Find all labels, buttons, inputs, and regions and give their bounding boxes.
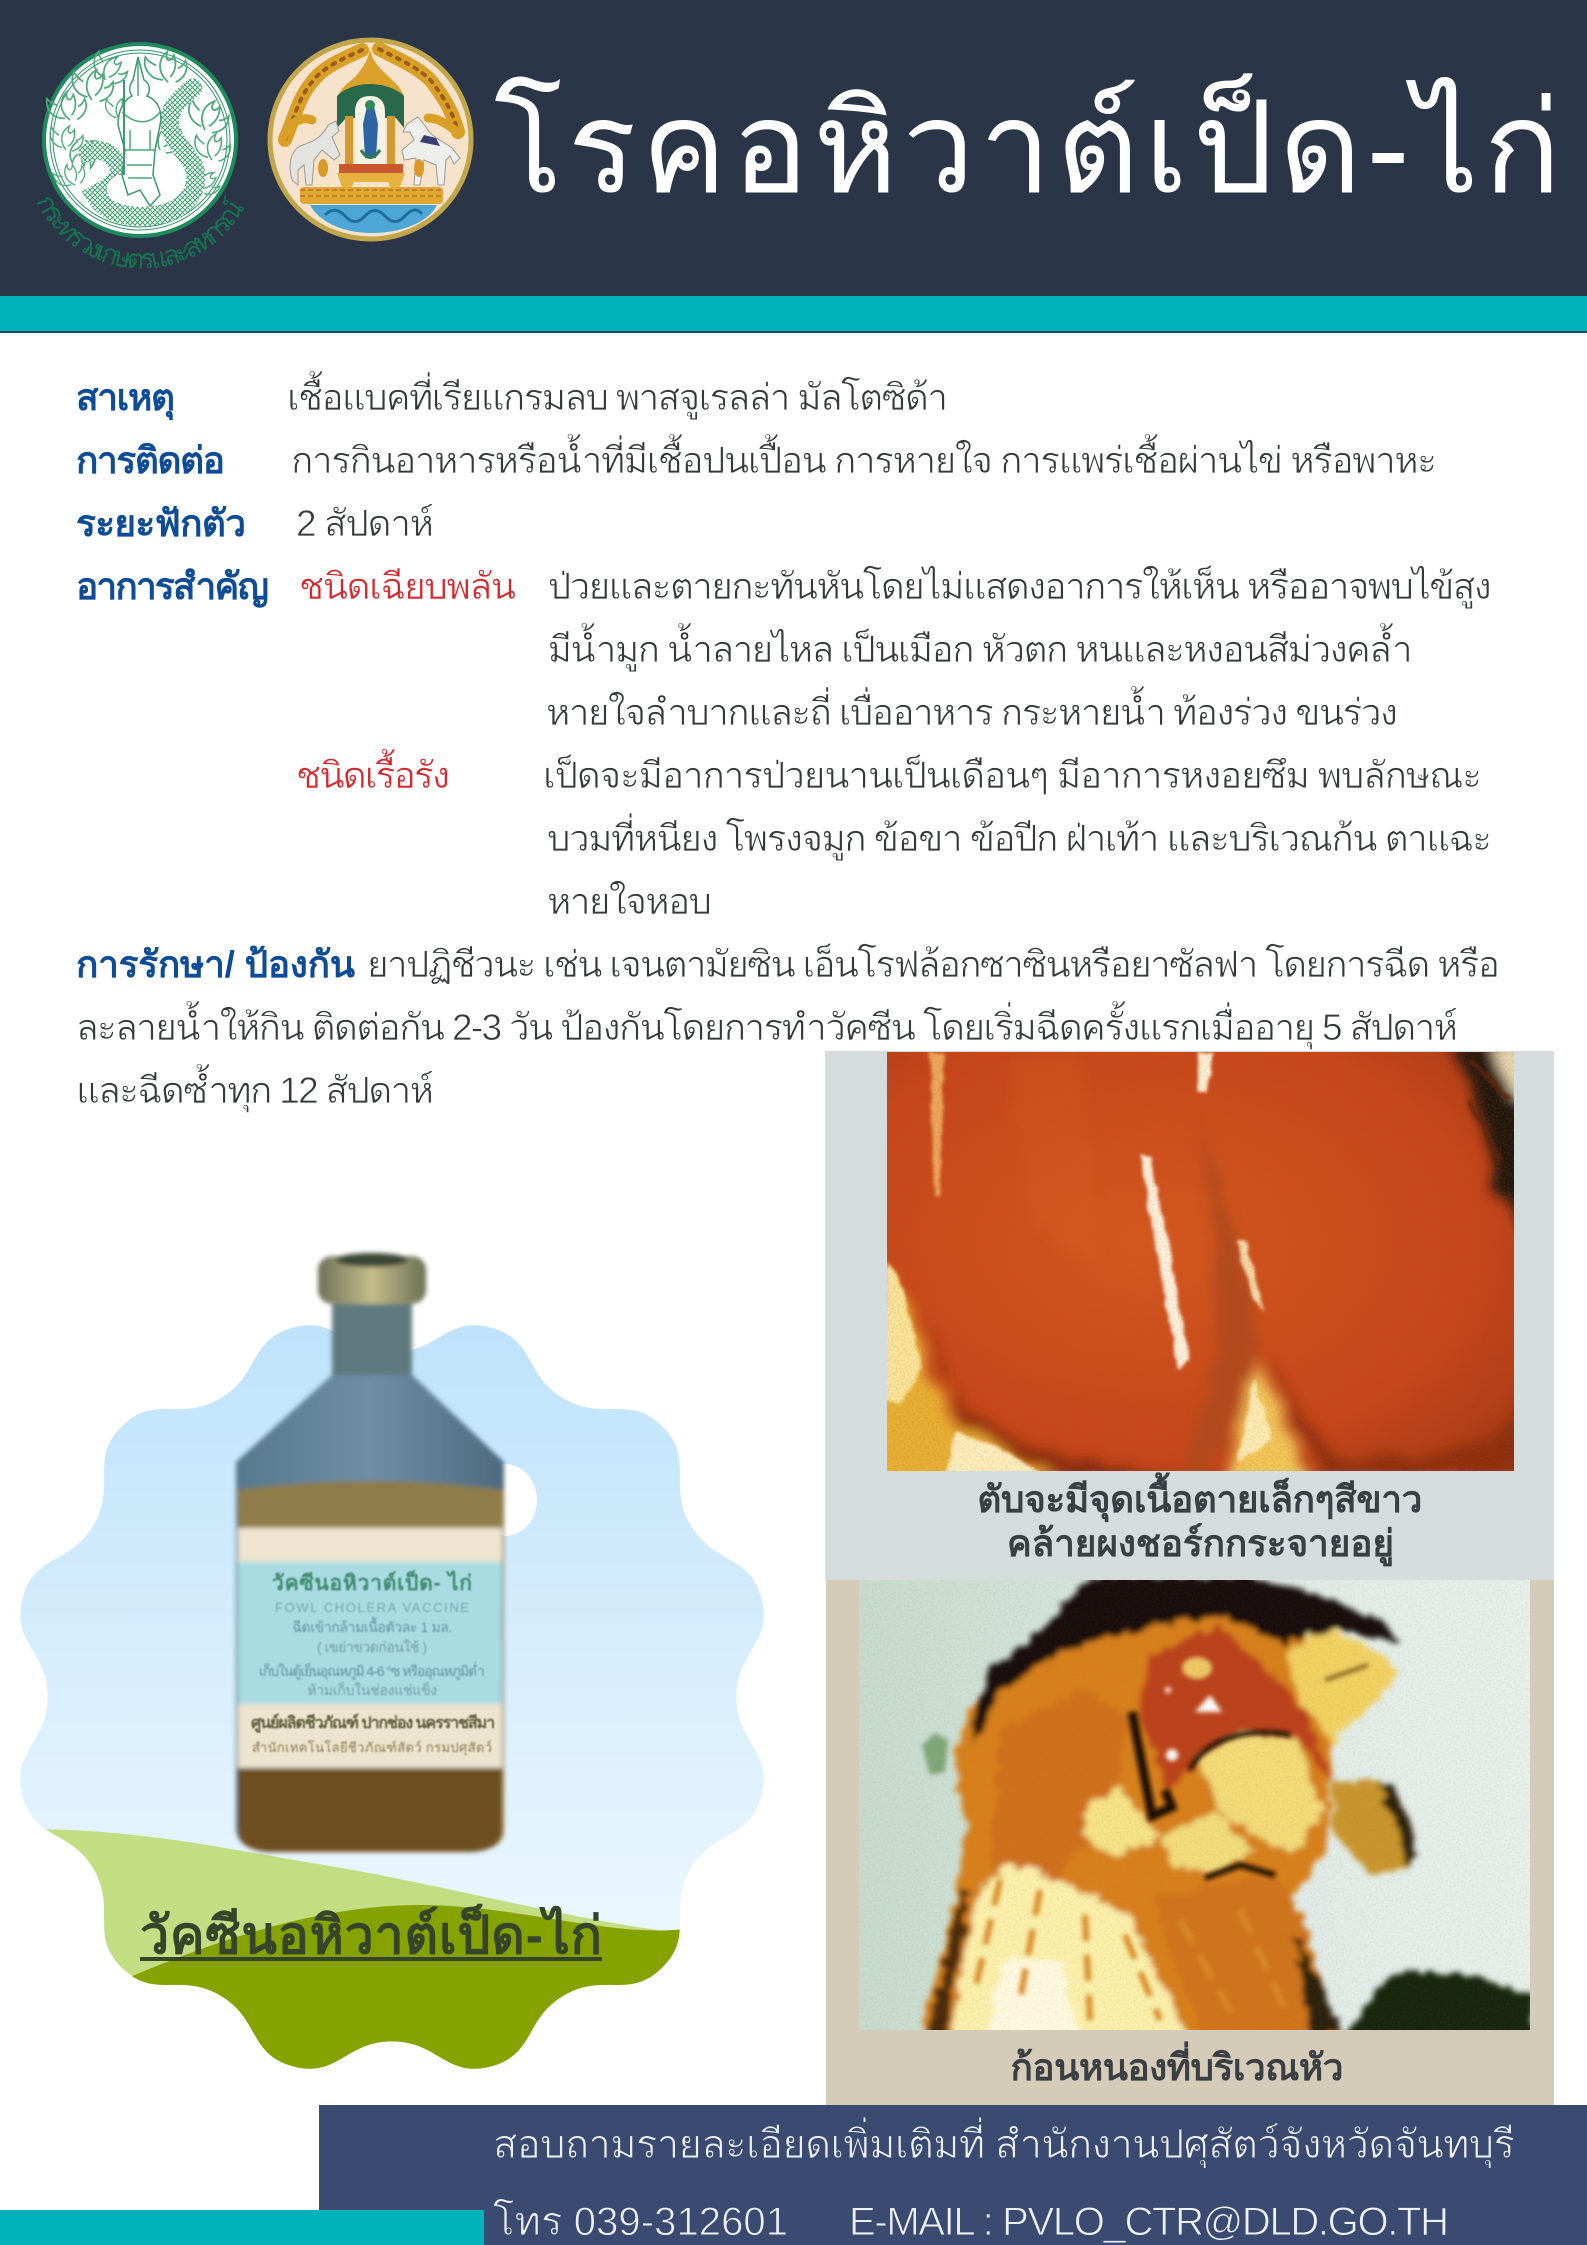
icon: vaccine bottle: ฉีดเข้ากล้ามเนื้อตัวละ 1 มล. xyxy=(292,1617,452,1635)
icon: vaccine bottle: สำนักเทคโนโลยีชีวภัณฑ์สัตว์ กรมปศุสัตว์ xyxy=(252,1740,492,1756)
info: acute symptoms: ชนิดเฉียบพลัน xyxy=(299,566,516,607)
info: transmission: การกินอาหารหรือน้ำที่มีเชื้อปนเปื้อน การหายใจ การแพร่เชื้อผ่านไข่ หรือพาหะ xyxy=(291,433,1437,481)
header band xyxy=(0,0,1587,333)
logo: livestock department seal xyxy=(270,40,471,239)
panel: chicken lesion photo and caption xyxy=(826,1575,1554,2105)
icon: vaccine bottle: ศูนย์ผลิตชีวภัณฑ์ ปากช่อง นครราชสีมา xyxy=(251,1713,495,1734)
logo: ministry seal xyxy=(37,42,244,269)
sky blob xyxy=(20,1325,764,1930)
icon: vaccine bottle: เก็บในตู้เย็นอุณหภูมิ 4-6 °ซ หรืออุณหภูมิต่ำ xyxy=(259,1662,485,1680)
photo: chicken head xyxy=(859,1575,1535,2040)
info: incubation xyxy=(76,503,434,544)
hills xyxy=(46,1829,680,2069)
info: acute symptoms: ป่วยและตายกะทันหันโดยไม่แสดงอาการให้เห็น หรืออาจพบไข้สูง xyxy=(548,563,1492,609)
photo: liver xyxy=(887,1052,1514,1471)
info: chronic symptoms: หายใจหอบ xyxy=(547,880,712,922)
info: treatment and prevention: การรักษา/ ป้องกัน xyxy=(76,944,355,985)
info: acute symptoms xyxy=(76,563,1492,733)
contact: phone: โทร 039-312601 xyxy=(493,2199,788,2244)
caption: liver: ตับจะมีจุดเนื้อตายเล็กๆสีขาว xyxy=(977,1472,1422,1523)
contact: office: สอบถามรายละเอียดเพิ่มเติมที่ สำนักงานปศุสัตว์จังหวัดจันทบุรี xyxy=(493,2117,1515,2169)
info: cause xyxy=(76,370,948,421)
highlight behind bottle xyxy=(473,1464,537,1536)
info: treatment and prevention xyxy=(76,941,1500,1113)
info: treatment and prevention: ละลายน้ำให้กิน ติดต่อกัน 2-3 วัน ป้องกันโดยการทำวัคซีน โดยเริ่มฉีดครั้งแรกเมื่ออายุ 5 สัปดาห์ xyxy=(76,1000,1458,1050)
info: chronic symptoms xyxy=(296,748,1492,922)
title: โรคอหิวาต์เป็ด-ไก่ xyxy=(494,72,1561,220)
caption: liver: คล้ายผงชอร์กกระจายอยู่ xyxy=(1007,1523,1394,1567)
logo: ministry seal: กระทรวงเกษตรและสหกรณ์ xyxy=(37,195,244,269)
contact: email: E-MAIL : PVLO_CTR@DLD.GO.TH xyxy=(849,2200,1449,2244)
info: acute symptoms: หายใจลำบากและถี่ เบื่ออาหาร กระหายน้ำ ท้องร่วง ขนร่วง xyxy=(546,685,1398,733)
icon: vaccine bottle: FOWL CHOLERA VACCINE xyxy=(275,1600,469,1615)
icon: vaccine bottle: ห้ามเก็บในช่องแช่แข็ง xyxy=(307,1681,437,1698)
caption: chicken: ก้อนหนองที่บริเวณหัว xyxy=(1011,2041,1344,2088)
icon: vaccine bottle: ( เขย่าขวดก่อนใช้ ) xyxy=(317,1639,427,1655)
info: cause: สาเหตุ xyxy=(76,377,175,421)
panel: liver lesion photo and caption xyxy=(825,1045,1554,1580)
caption: liver xyxy=(977,1472,1422,1567)
info: incubation: 2 สัปดาห์ xyxy=(296,503,434,544)
icon: vaccine bottle xyxy=(236,1253,504,1852)
info: incubation: ระยะฟักตัว xyxy=(76,503,246,544)
info: cause: เชื้อแบคที่เรียแกรมลบ พาสจูเรลล่า มัลโตซิด้า xyxy=(287,370,948,420)
info: chronic symptoms: ชนิดเรื้อรัง xyxy=(296,748,450,796)
info: chronic symptoms: บวมที่หนียง โพรงจมูก ข้อขา ข้อปีก ฝ่าเท้า และบริเวณก้น ตาแฉะ xyxy=(547,812,1492,861)
info: acute symptoms: มีน้ำมูก น้ำลายไหล เป็นเมือก หัวตก หนและหงอนสีม่วงคล้ำ xyxy=(548,622,1413,672)
panel: vaccine badge xyxy=(0,1253,790,2100)
info: treatment and prevention: ยาปฏิชีวนะ เช่น เจนตามัยซิน เอ็นโรฟล้อกซาซินหรือยาซัลฟา โดยการฉีด หรือ xyxy=(367,941,1500,985)
info: transmission: การติดต่อ xyxy=(76,440,225,481)
info: acute symptoms: อาการสำคัญ xyxy=(76,566,269,608)
footer contact band xyxy=(0,2105,1587,2245)
vaccine label: วัคซีนอหิวาต์เป็ด-ไก่ xyxy=(140,1904,602,1965)
info: chronic symptoms: เป็ดจะมีอาการป่วยนานเป็นเดือนๆ มีอาการหงอยซึม พบลักษณะ xyxy=(543,752,1482,796)
info: treatment and prevention: และฉีดซ้ำทุก 12 สัปดาห์ xyxy=(76,1063,434,1113)
icon: vaccine bottle: วัคซีนอหิวาต์เป็ด- ไก่ xyxy=(272,1569,472,1595)
